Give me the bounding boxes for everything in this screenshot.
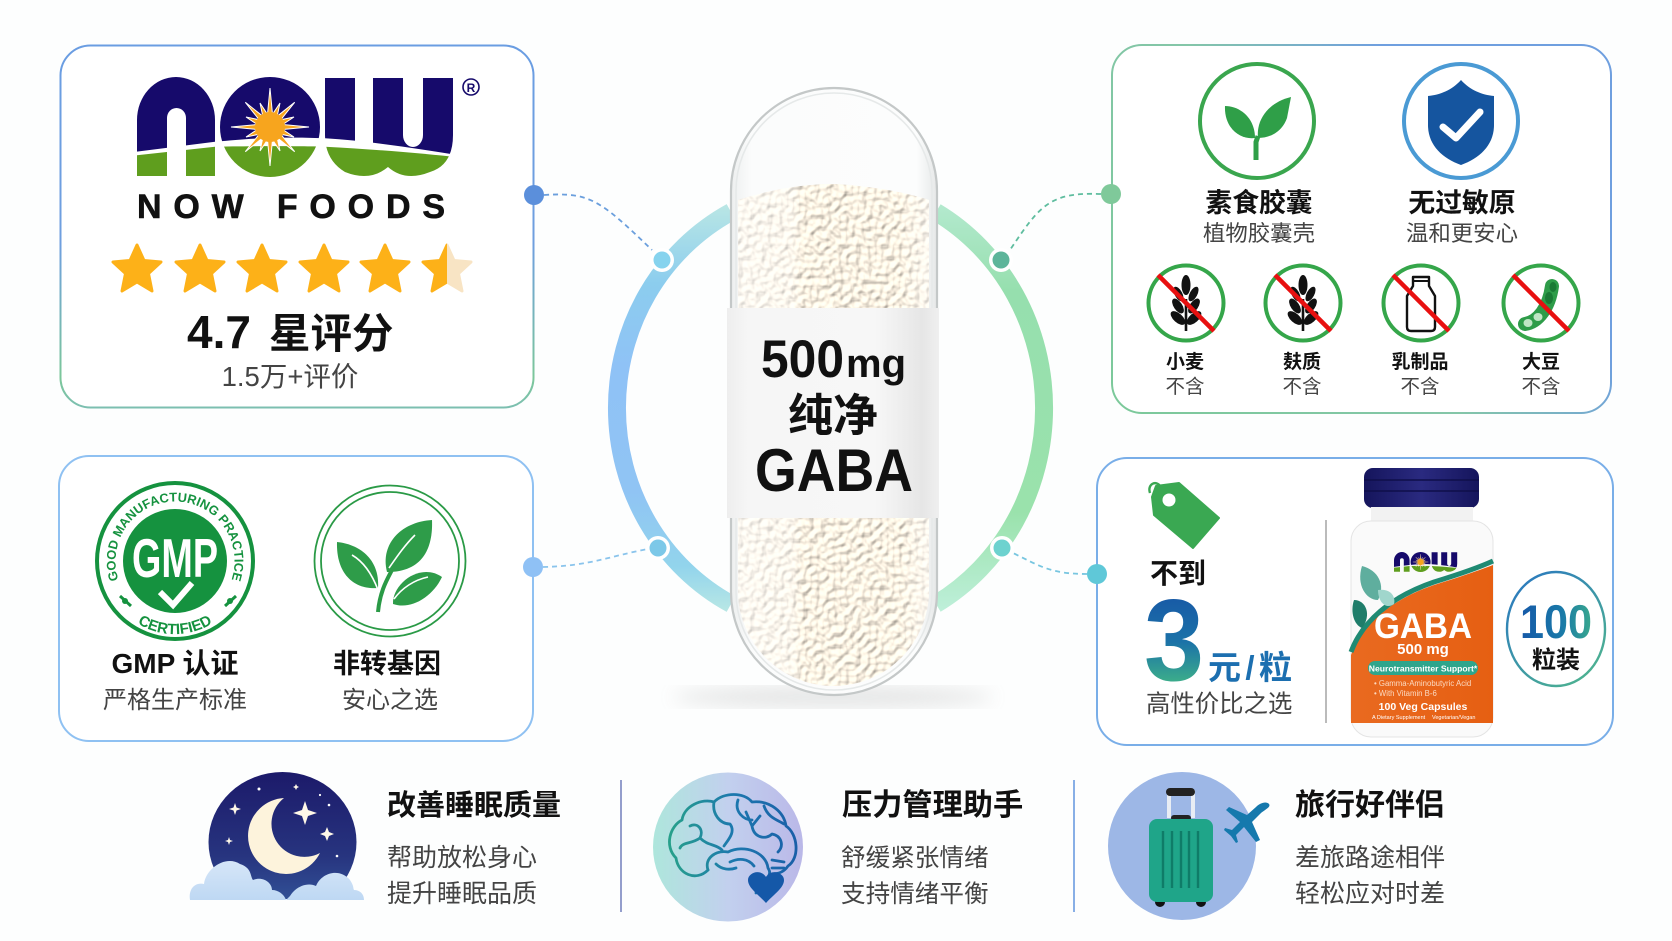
band text: pure: 纯净 xyxy=(788,390,878,441)
price prefix: 不到 xyxy=(1150,558,1206,589)
product bottle: Vegetarian/Vegan xyxy=(1432,715,1475,721)
allergen subtext: 温和更安心 xyxy=(1406,221,1518,246)
registered mark xyxy=(463,79,479,95)
dashed connectors xyxy=(543,194,1101,574)
GMP seal: CERTIFIED xyxy=(140,616,210,634)
icon: suitcase and plane xyxy=(1108,772,1269,920)
panel: brand and rating xyxy=(60,46,534,408)
allergen heading: 无过敏原 xyxy=(1408,188,1516,218)
band text: 500mg: 500 xyxy=(761,330,844,389)
GMP label: GMP 认证 xyxy=(111,648,239,679)
divider xyxy=(1325,520,1327,723)
icon: shield xyxy=(1404,64,1518,178)
sleep text: 帮助放松身心 xyxy=(387,844,537,872)
price number: 3 xyxy=(1144,575,1204,705)
product bottle: A Dietary Supplement xyxy=(1372,715,1426,721)
no dairy: 不含 xyxy=(1400,376,1440,398)
capsule shadow xyxy=(673,687,993,707)
sleep heading: 改善睡眠质量 xyxy=(387,789,561,822)
travel text 2: 轻松应对时差 xyxy=(1295,880,1445,908)
rating score: 4.7 xyxy=(187,306,251,358)
GMP seal xyxy=(95,481,255,641)
icon: price tag xyxy=(1149,483,1219,548)
GMP sublabel: 严格生产标准 xyxy=(103,687,247,714)
band text: GABA: GABA xyxy=(755,437,913,504)
no dairy: 乳制品 xyxy=(1391,351,1449,373)
star rating xyxy=(113,245,471,291)
non-GMO icon xyxy=(314,486,466,636)
capsule label band xyxy=(727,308,939,518)
price unit: 元/粒 xyxy=(1208,649,1292,686)
quantity badge: 100 xyxy=(1520,595,1592,648)
icon: vegan leaf xyxy=(1200,64,1314,178)
GMP seal: GMP xyxy=(132,527,218,589)
panel: price and bottle xyxy=(1097,458,1613,745)
stress text 2: 支持情绪平衡 xyxy=(841,880,989,908)
no soy: 不含 xyxy=(1521,376,1561,398)
logo: NOW xyxy=(137,77,453,177)
no soy: 大豆 xyxy=(1522,351,1560,373)
product bottle: Neurotransmitter Support* xyxy=(1369,664,1478,674)
icon: brain and heart xyxy=(653,772,803,922)
no wheat xyxy=(1148,266,1224,398)
connector dot: certifications xyxy=(523,557,543,577)
no dairy xyxy=(1384,266,1458,398)
no gluten xyxy=(1266,266,1340,398)
travel text: 差旅路途相伴 xyxy=(1295,844,1445,872)
capsule ring xyxy=(617,212,1044,604)
product bottle xyxy=(1351,468,1493,737)
registered mark: R xyxy=(467,81,476,95)
stress heading: 压力管理助手 xyxy=(842,788,1023,822)
benefit: travel xyxy=(1108,772,1445,920)
stress text: 舒缓紧张情绪 xyxy=(841,844,989,872)
brand name: NOW FOODS xyxy=(137,188,445,226)
non-GMO label: 非转基因 xyxy=(333,649,441,679)
benefit: stress xyxy=(653,772,1023,922)
no wheat: 不含 xyxy=(1165,376,1205,398)
quantity badge xyxy=(1507,572,1605,686)
product bottle: • Gamma-Aminobutyric Acid xyxy=(1374,679,1471,688)
travel heading: 旅行好伴侣 xyxy=(1295,789,1445,822)
no gluten: 麸质 xyxy=(1283,350,1321,373)
no soy xyxy=(1504,266,1578,398)
icon: moon and clouds xyxy=(190,772,364,912)
ring nodes xyxy=(646,248,1014,560)
product bottle: 500 mg xyxy=(1397,641,1449,658)
review count: 1.5万+评价 xyxy=(222,361,358,392)
connector dot: brand xyxy=(524,185,544,205)
benefit: sleep xyxy=(190,772,561,912)
product bottle: GABA xyxy=(1374,607,1472,646)
vegan heading: 素食胶囊 xyxy=(1205,188,1313,218)
connector dot: price xyxy=(1087,564,1107,584)
product bottle: 100 Veg Capsules xyxy=(1379,701,1468,713)
no gluten: 不含 xyxy=(1282,376,1322,398)
non-GMO sublabel: 安心之选 xyxy=(342,687,438,714)
connector dot: vegan xyxy=(1101,184,1121,204)
product bottle: • With Vitamin B-6 xyxy=(1374,689,1437,698)
band text: mg: mg xyxy=(846,342,906,386)
no wheat: 小麦 xyxy=(1166,351,1204,373)
rating score: 星评分 xyxy=(269,310,394,357)
panel: certifications xyxy=(58,455,534,742)
quantity badge: 粒装 xyxy=(1532,647,1580,674)
vegan subtext: 植物胶囊壳 xyxy=(1203,221,1315,246)
sleep text 2: 提升睡眠品质 xyxy=(387,880,537,908)
GMP seal: GOOD MANUFACTURING PRACTICE xyxy=(106,492,244,582)
capsule xyxy=(731,88,937,695)
value text: 高性价比之选 xyxy=(1146,691,1292,718)
panel: vegan and allergen-free xyxy=(1112,45,1611,413)
